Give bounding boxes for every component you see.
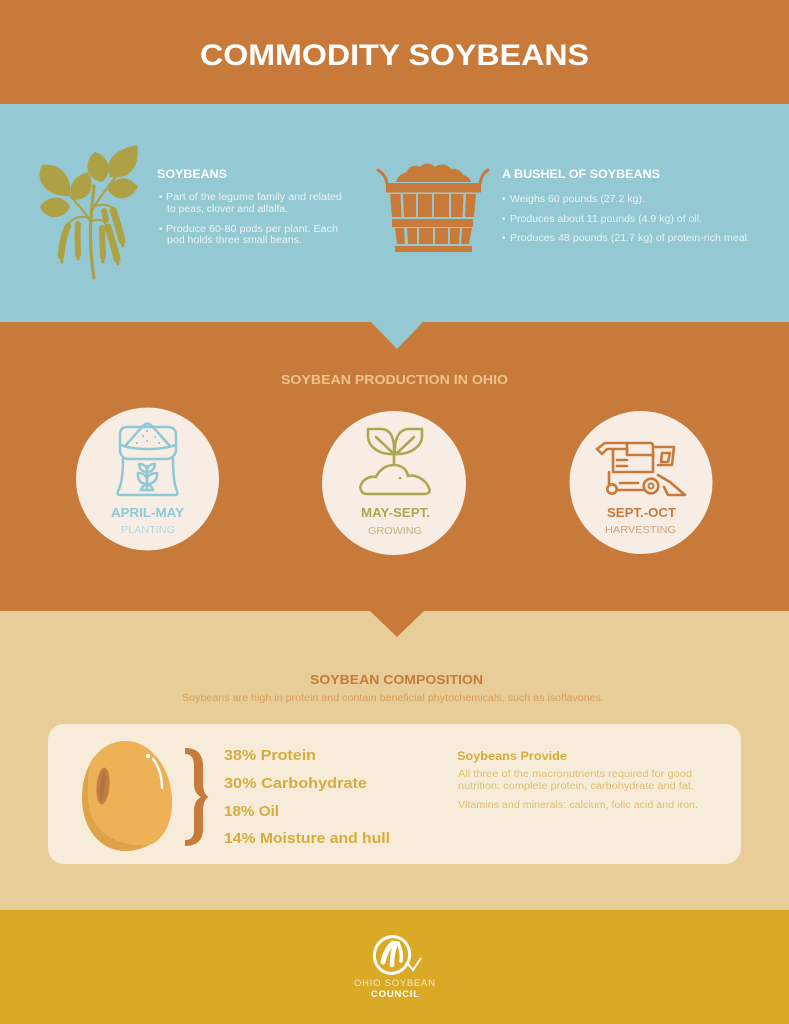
title: COMMODITY SOYBEANS: [200, 39, 589, 72]
text block: bushel bullets: •: [502, 194, 506, 205]
text block: soybeans provide: All three of the macronutrients required for good: [458, 769, 692, 780]
text block: bushel bullets: Weighs 60 pounds (27.2 kg).: [510, 194, 645, 205]
list: percentages: 38% Protein: [224, 748, 316, 764]
text block: bushel bullets: Produces 48 pounds (21.7 kg) of protein-rich meal.: [510, 233, 750, 244]
icon: brace: [185, 748, 208, 846]
list: percentages: 30% Carbohydrate: [224, 776, 367, 792]
list: percentages: [224, 748, 390, 847]
circle: growing: [322, 411, 466, 555]
label: April-May: APRIL-MAY: [111, 505, 184, 520]
heading: composition: SOYBEAN COMPOSITION: [310, 673, 483, 687]
icon: bushel basket: [378, 164, 488, 252]
text block: soybeans bullets: to peas, clover and alfalfa.: [167, 204, 288, 215]
label: planting: PLANTING: [121, 524, 175, 536]
icon: soybean plant: [40, 145, 138, 278]
panel: soybean facts: [0, 104, 789, 322]
text block: bushel bullets: •: [502, 233, 506, 244]
arrow: blue pointer: [371, 322, 423, 349]
label: May-Sept: MAY-SEPT.: [361, 505, 430, 520]
heading: soybeans provide: Soybeans Provide: [457, 749, 567, 763]
heading: soybeans: SOYBEANS: [157, 169, 227, 181]
label: growing: GROWING: [368, 525, 422, 537]
text block: bushel bullets: [502, 194, 750, 244]
heading: production: SOYBEAN PRODUCTION IN OHIO: [281, 373, 508, 387]
arrow: orange pointer: [370, 611, 424, 637]
panel: composition: [0, 611, 789, 910]
list: percentages: 14% Moisture and hull: [224, 831, 390, 847]
text block: soybeans bullets: [159, 192, 342, 246]
logo text: Ohio Soybean: OHIO SOYBEAN: [354, 978, 435, 989]
text block: soybeans provide: [458, 769, 698, 811]
icon: sprout: [360, 429, 430, 494]
text block: soybeans bullets: pod holds three small beans.: [167, 235, 302, 246]
text block: composition intro: Soybeans are high in protein and contain beneficial phytochemicals, such as isoflavones.: [182, 693, 604, 704]
text block: soybeans provide: nutrition: complete protein, carbohydrate and fat.: [458, 781, 694, 792]
icon: logo: [369, 932, 421, 978]
icon: combine harvester: [597, 443, 685, 495]
text block: bushel bullets: Produces about 11 pounds (4.9 kg) of oil.: [510, 214, 702, 225]
circle: harvesting: [570, 411, 712, 554]
heading: bushel: A BUSHEL OF SOYBEANS: [502, 169, 660, 181]
text block: soybeans bullets: Produce 60-80 pods per plant. Each: [166, 224, 338, 235]
label: Sept-Oct: SEPT.-OCT: [607, 505, 676, 520]
icon: soybean: [82, 741, 172, 851]
text block: bushel bullets: •: [502, 214, 506, 225]
label: harvesting: HARVESTING: [605, 524, 676, 536]
icon: seed bag: [118, 424, 177, 495]
logo text: Council: COUNCIL: [371, 989, 419, 1000]
list: percentages: 18% Oil: [224, 804, 279, 820]
text block: soybeans provide: Vitamins and minerals: calcium, folic acid and iron.: [458, 800, 698, 811]
circle: planting: [76, 408, 219, 550]
panel: title banner: [0, 0, 789, 104]
panel: production in Ohio: [0, 322, 789, 611]
card: composition details: [48, 724, 741, 864]
text block: soybeans bullets: •: [159, 224, 163, 235]
text block: soybeans bullets: •: [159, 192, 163, 203]
panel: footer: [0, 910, 789, 1024]
text block: soybeans bullets: Part of the legume family and related: [166, 192, 342, 203]
